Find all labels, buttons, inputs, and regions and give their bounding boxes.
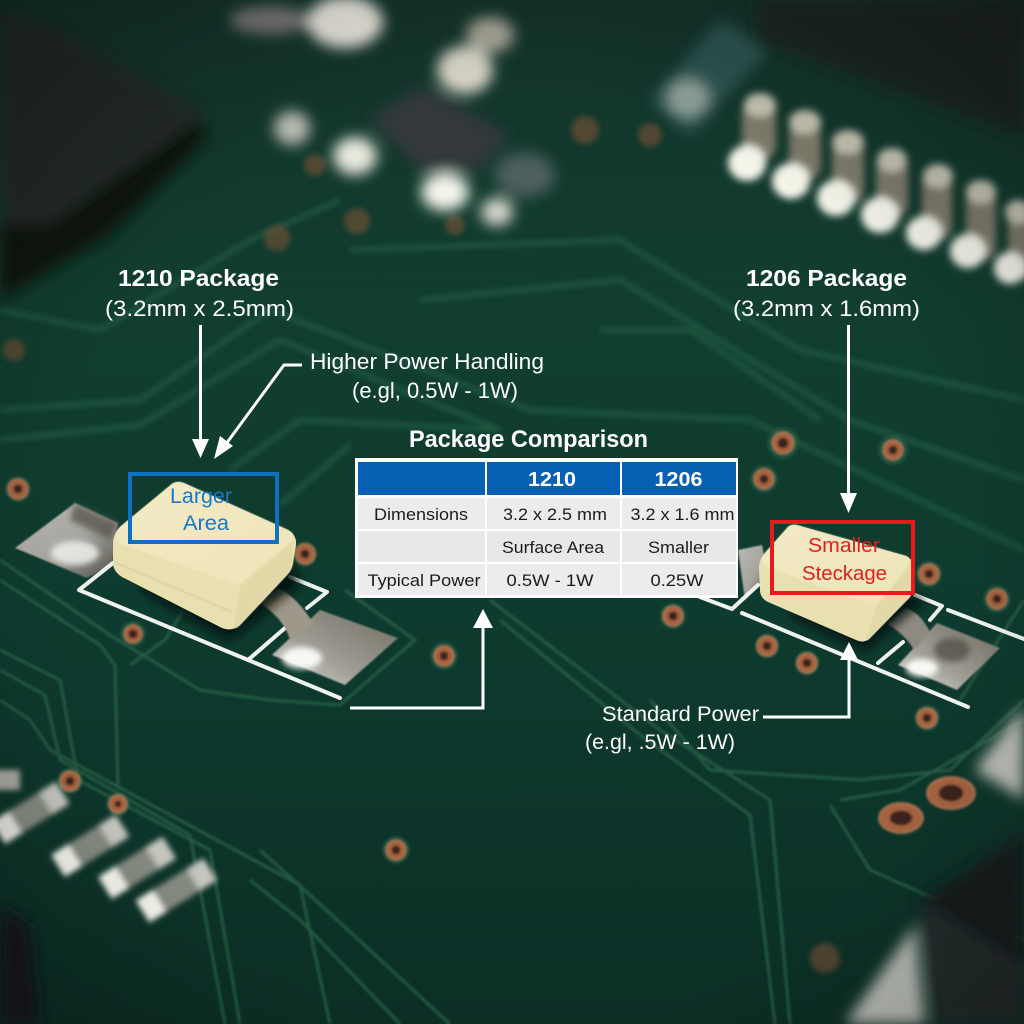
comparison table bbox=[355, 458, 738, 598]
right pad and lead 1210 bbox=[258, 588, 398, 685]
table header row: 1210 bbox=[528, 469, 576, 491]
small resistors bottom-left bbox=[0, 770, 217, 923]
table row: dimensions bbox=[358, 498, 736, 529]
1206 chip bbox=[759, 525, 925, 650]
higher power callout bbox=[310, 349, 544, 403]
arrow: higher power to chip bbox=[214, 365, 302, 459]
standard power callout bbox=[585, 703, 759, 754]
arrow: 1206 label to chip bbox=[840, 325, 857, 513]
upper blurred traces bbox=[0, 200, 1024, 550]
1210 highlight box: Area bbox=[183, 512, 229, 535]
silkscreen outline 1210 bbox=[79, 563, 340, 698]
1206 package heading bbox=[733, 265, 920, 321]
table row: dimensions: Dimensions bbox=[374, 505, 468, 524]
1206 highlight box: Steckage bbox=[802, 563, 887, 585]
table row: dimensions: 3.2 x 2.5 mm bbox=[503, 505, 607, 524]
blurred bottom corner components bbox=[0, 705, 1024, 1024]
board traces bbox=[0, 560, 1024, 1024]
higher power callout: Higher Power Handling bbox=[310, 349, 544, 374]
left pad 1206 bbox=[738, 545, 768, 600]
arrow: table leader bbox=[350, 609, 493, 708]
1206 package heading: (3.2mm x 1.6mm) bbox=[733, 296, 920, 321]
table row: surface area: Smaller bbox=[648, 538, 709, 557]
standard power callout: (e.gl, .5W - 1W) bbox=[585, 731, 735, 754]
1210 package heading bbox=[105, 265, 294, 321]
right pad and lead 1206 bbox=[887, 608, 1000, 690]
arrow: 1210 label to chip bbox=[192, 325, 209, 458]
table header row: 1206 bbox=[654, 469, 702, 491]
1210 package heading: 1210 Package bbox=[118, 265, 279, 291]
standard power callout: Standard Power bbox=[602, 703, 759, 726]
table row: typical power: 0.5W - 1W bbox=[506, 571, 594, 590]
1210 chip bbox=[113, 482, 300, 640]
higher power callout: (e.gl, 0.5W - 1W) bbox=[352, 378, 518, 403]
1210 package heading: (3.2mm x 2.5mm) bbox=[105, 296, 294, 321]
arrow: standard power to chip bbox=[763, 642, 858, 717]
table header row bbox=[358, 462, 736, 495]
table row: typical power: Typical Power bbox=[368, 571, 481, 590]
table row: typical power: 0.25W bbox=[650, 571, 704, 590]
table row: typical power bbox=[358, 564, 736, 595]
silkscreen outline 1206 bbox=[700, 585, 1024, 707]
table row: surface area bbox=[358, 531, 736, 562]
table row: surface area: Surface Area bbox=[502, 538, 605, 557]
blurred top-left chip bbox=[0, 10, 205, 300]
1210 highlight box: Larger bbox=[170, 485, 232, 508]
left pad 1210 bbox=[15, 503, 118, 578]
table row: dimensions: 3.2 x 1.6 mm bbox=[630, 505, 734, 524]
1206 highlight box: Smaller bbox=[808, 535, 880, 557]
blurred top-right IC with pins bbox=[728, 0, 1024, 284]
1206 package heading: 1206 Package bbox=[746, 265, 907, 291]
table title: Package Comparison bbox=[409, 426, 648, 453]
1206 highlight box bbox=[772, 522, 913, 593]
1210 highlight box bbox=[130, 474, 277, 542]
blurred top-centre components bbox=[230, 0, 770, 226]
